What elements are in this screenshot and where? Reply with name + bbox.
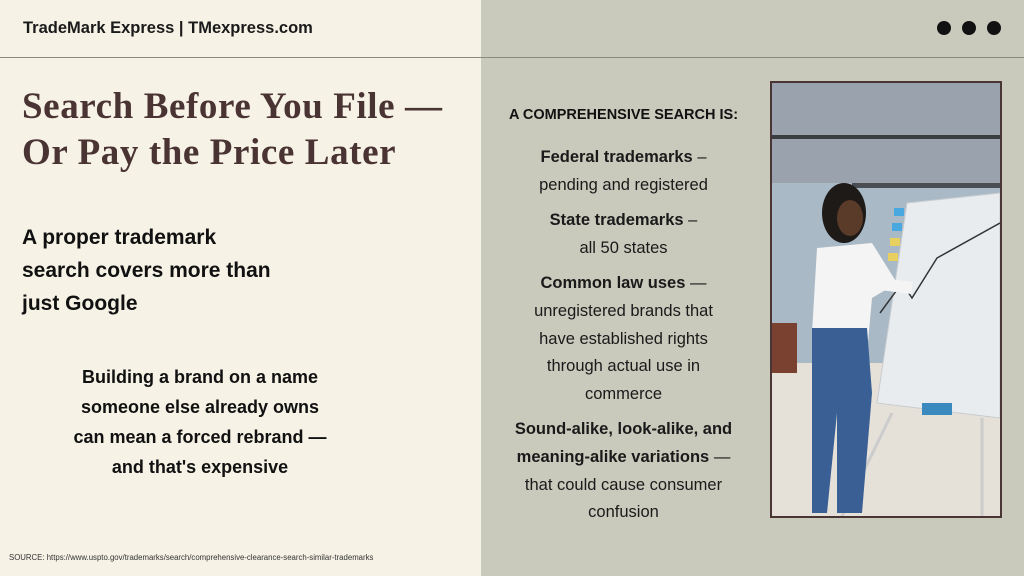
title: Search Before You File —	[22, 86, 443, 127]
item: federal	[539, 148, 708, 194]
item: common law: through actual use in	[547, 357, 700, 375]
item: federal: Federal trademarks –	[540, 148, 706, 166]
item: variations	[515, 420, 732, 521]
paragraph: rebrand warning: can mean a forced rebrand —	[73, 427, 327, 447]
item: common law: unregistered brands that	[534, 302, 713, 320]
subheading: just Google	[22, 292, 138, 315]
item: variations: meaning-alike variations —	[517, 448, 730, 466]
item: common law: commerce	[585, 385, 662, 403]
subheading	[22, 226, 271, 315]
paragraph: rebrand warning: someone else already owns	[81, 397, 319, 417]
left panel background	[0, 0, 481, 576]
item: common law: have established rights	[539, 330, 708, 348]
title: Or Pay the Price Later	[22, 132, 396, 173]
photo: presenter at whiteboard	[770, 81, 1002, 518]
item: state	[550, 211, 698, 257]
list heading: A COMPREHENSIVE SEARCH IS:	[509, 107, 738, 123]
item: variations: confusion	[588, 503, 659, 521]
icon: three dots	[937, 21, 1001, 35]
item: federal: pending and registered	[539, 176, 708, 194]
right panel background	[481, 0, 1024, 576]
item: common law: Common law uses —	[541, 274, 706, 292]
item: state: all 50 states	[579, 239, 668, 257]
paragraph: rebrand warning: and that's expensive	[112, 457, 288, 477]
item: variations: that could cause consumer	[525, 476, 722, 494]
item: common law	[534, 274, 713, 403]
title	[22, 86, 443, 173]
header brand text: TradeMark Express | TMexpress.com	[23, 19, 313, 37]
source footnote: SOURCE: https://www.uspto.gov/trademarks/search/comprehensive-clearance-search-similar-trademarks	[9, 553, 373, 562]
paragraph: rebrand warning	[73, 367, 327, 477]
paragraph: rebrand warning: Building a brand on a name	[82, 367, 318, 387]
item: state: State trademarks –	[550, 211, 697, 229]
list of search components	[515, 148, 732, 521]
subheading: search covers more than	[22, 259, 271, 282]
subheading: A proper trademark	[22, 226, 216, 249]
item: variations: Sound-alike, look-alike, and	[515, 420, 732, 438]
